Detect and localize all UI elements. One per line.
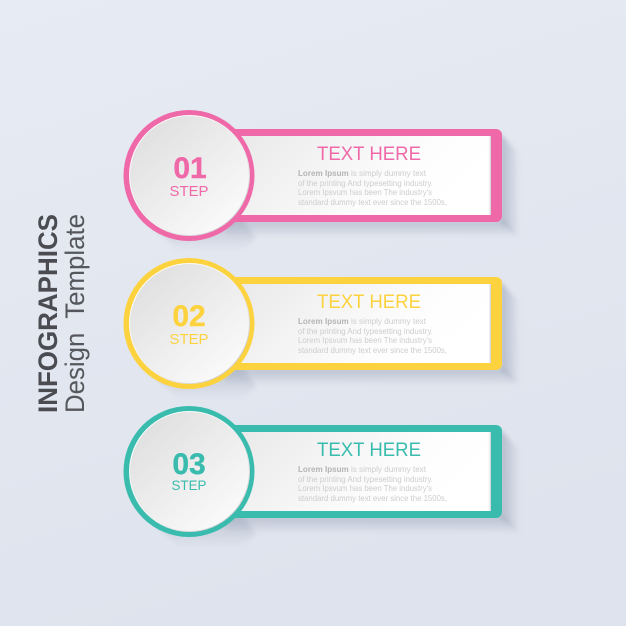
body text [298,168,447,207]
heading: text here: TEXT HERE [317,144,421,165]
body text: Lorem Ipsum is simply dummy text [298,168,427,178]
circle: step 2 badge [124,258,254,389]
shadow: bar right [500,133,520,238]
title: infographics design template [33,214,90,413]
body text: Lorem Ipsvum has been The industry's [298,483,432,493]
shadow: bar bottom [225,220,520,238]
body text: standard dummy text ever since the 1500s, [298,493,447,503]
heading: infographics: INFOGRAPHICS [33,214,63,413]
body text [298,316,447,355]
step 3 [124,406,520,548]
number 03: 03 [172,448,206,481]
body text: of the printing And typesetting industry. [298,474,433,484]
heading: text here: TEXT HERE [317,440,421,461]
shadow: circle [140,511,256,548]
body text: of the printing And typesetting industry. [298,326,433,336]
body text: Lorem Ipsvum has been The industry's [298,187,432,197]
panel: step 1 bar [225,129,502,222]
shadow: bar right [500,429,520,534]
label step: STEP [170,331,208,348]
shadow: circle [140,215,256,252]
body text: Lorem Ipsum is simply dummy text [298,464,427,474]
body text: standard dummy text ever since the 1500s, [298,345,447,355]
body text: standard dummy text ever since the 1500s, [298,197,447,207]
circle: step 1 badge [124,110,254,241]
label step: STEP [172,477,206,493]
shadow: bar right [500,281,520,386]
panel: step 3 inner [225,432,491,511]
shadow: circle [140,363,256,400]
body text: Lorem Ipsum is simply dummy text [298,316,427,326]
step 1 [124,110,520,252]
shadow: bar bottom [225,516,520,534]
number 02: 02 [172,300,206,333]
inner edge [488,136,491,215]
panel: step 2 bar [225,277,502,370]
panel: step 2 inner [225,284,491,363]
inner edge [488,284,491,363]
number 01: 01 [173,152,207,185]
step 2 [124,258,520,400]
heading: text here: TEXT HERE [317,292,421,313]
body text: of the printing And typesetting industry. [298,178,433,188]
label step: STEP [170,183,208,200]
panel: step 1 inner [225,136,491,215]
body text [298,464,447,503]
inner edge [488,432,491,511]
subheading: design template: Design Template [60,214,90,413]
circle: step 3 badge [124,406,254,537]
shadow: bar bottom [225,368,520,386]
body text: Lorem Ipsvum has been The industry's [298,335,432,345]
panel: step 3 bar [225,425,502,518]
